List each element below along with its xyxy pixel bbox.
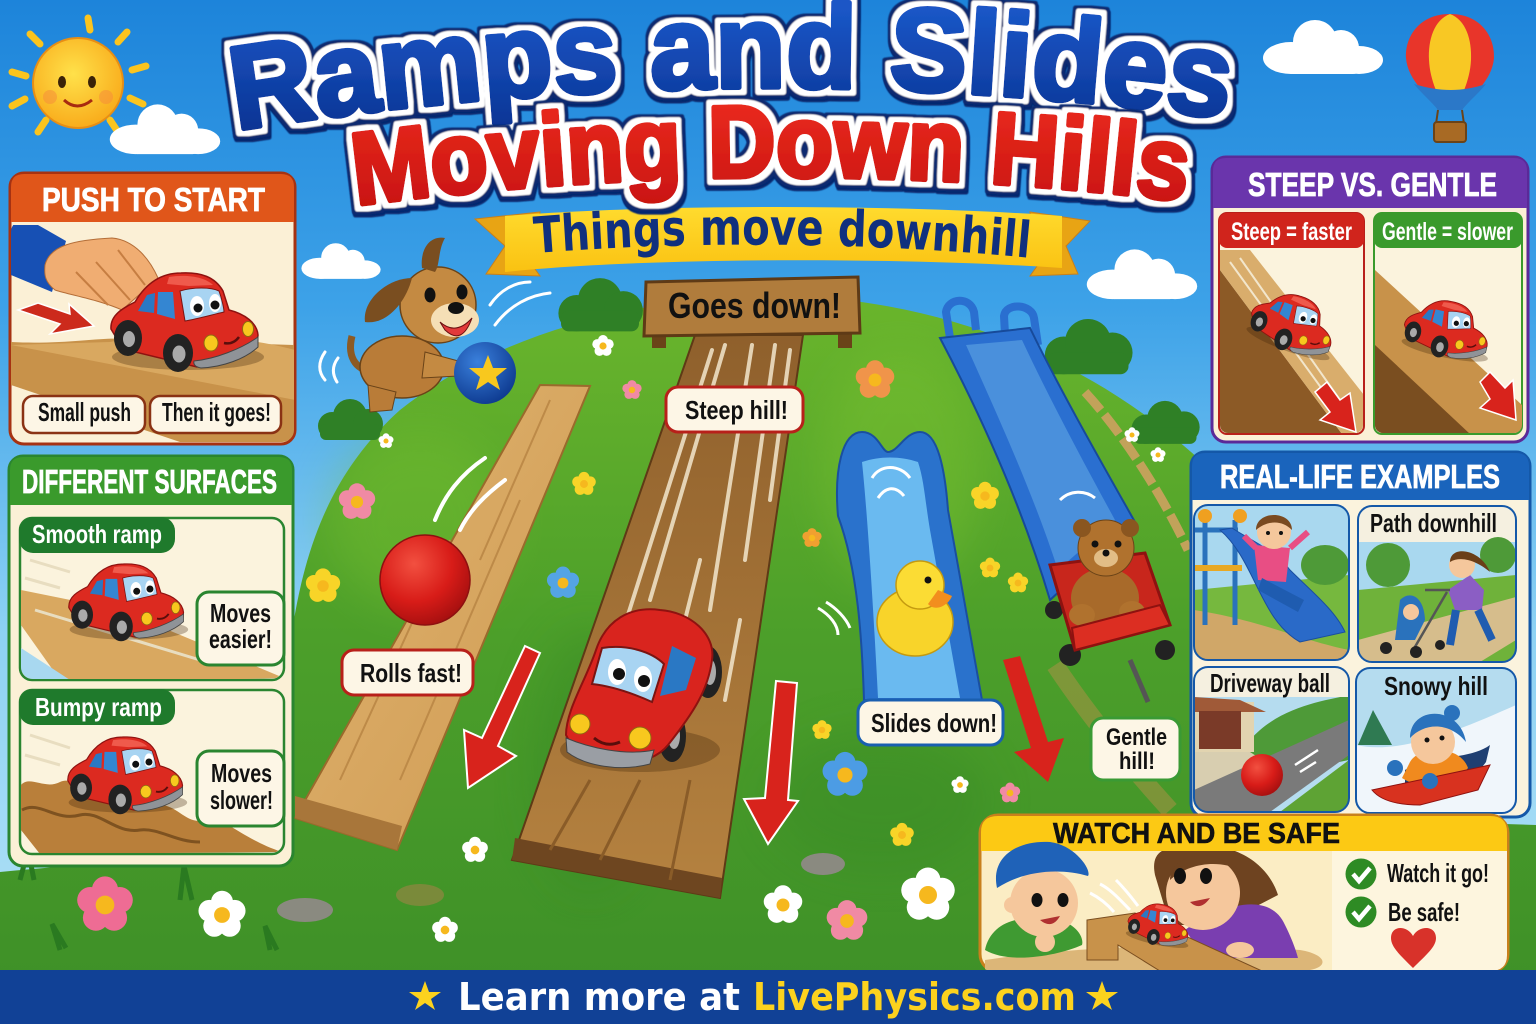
red ball rolling: [380, 535, 470, 625]
steep dark wooden ramp: [512, 335, 803, 898]
toy car on gentle ramp: [1399, 293, 1498, 368]
panel: push to start: [10, 173, 295, 444]
callout: moves easier: [197, 592, 284, 665]
mother: [1154, 845, 1298, 958]
example: playground slide: [1194, 505, 1349, 660]
panel: steep vs gentle: [1212, 157, 1528, 442]
cloud near sun: [110, 104, 220, 154]
label: Steep hill!: Steep hill!: [685, 395, 788, 425]
check: Be safe: [1346, 896, 1460, 928]
check: Watch it go: Watch it go!: [1387, 858, 1489, 888]
panel: different surfaces: [9, 456, 293, 866]
cloud right of hill: [1087, 249, 1197, 299]
header: watch and be safe: WATCH AND BE SAFE: [1053, 818, 1340, 850]
label: bumpy ramp: Bumpy ramp: [35, 692, 162, 722]
child: [985, 842, 1089, 958]
header: push to start: [11, 174, 294, 222]
right side background: [1332, 851, 1507, 971]
callout: moves easier: Moves: [210, 598, 271, 628]
label: Gentle hill!: [1091, 718, 1180, 780]
panel: watch and be safe: [980, 815, 1508, 972]
label: steep = faster: Steep = faster: [1231, 218, 1352, 246]
title line 2: Moving Down Hills: Moving Down Hills: [342, 96, 1198, 218]
motion lines near puppy: [320, 282, 550, 382]
header: push to start: PUSH TO START: [42, 181, 265, 218]
toy car on steep ramp: [1243, 282, 1346, 367]
decorative flowers on hill: [77, 335, 1165, 942]
example: snowy hill: Snowy hill: [1384, 671, 1488, 701]
label: Small push: Small push: [38, 397, 131, 427]
footer band: LivePhysics.com: [753, 975, 1076, 1019]
small blue slide: [837, 432, 982, 700]
scene: hand pushing car on ramp: [11, 225, 295, 442]
star left: [409, 981, 441, 1010]
small ramp: [1087, 913, 1262, 971]
label: Gentle hill!: Gentle: [1106, 724, 1167, 751]
toy car on smooth ramp: [69, 564, 188, 641]
light wooden ramp: [295, 385, 590, 850]
label: Steep hill!: [666, 387, 803, 432]
label: Slides down!: [858, 700, 1003, 745]
icon: heart: [1391, 928, 1436, 968]
sign: Goes down!: Goes down!: [668, 285, 841, 326]
panel: real-life examples: [1191, 452, 1530, 817]
example: path downhill: [1358, 506, 1516, 662]
toy car on bumpy ramp: [68, 737, 187, 814]
header: steep vs gentle: [1213, 158, 1527, 208]
sub-panel: steep = faster: [1219, 213, 1364, 434]
cloud top right: [1263, 20, 1383, 74]
large red car on ramp: [560, 609, 722, 772]
header: different surfaces: [10, 457, 292, 505]
arrow: gentle down: [1480, 372, 1516, 420]
sub-panel: gentle = slower: [1374, 213, 1522, 434]
sub-panel: bumpy ramp: [19, 689, 284, 854]
icon: hot air balloon: [1406, 14, 1494, 142]
check: Be safe: Be safe!: [1388, 897, 1460, 927]
label: Rolls fast!: Rolls fast!: [360, 658, 462, 688]
sign: Goes down!: [644, 277, 860, 348]
callout: moves easier: easier!: [209, 624, 272, 654]
label: Then it goes!: [150, 396, 281, 433]
green hill: [0, 278, 1536, 975]
rubber duck: [877, 561, 953, 656]
motion lines: [1090, 880, 1138, 912]
label: smooth ramp: Smooth ramp: [32, 519, 162, 549]
label: steep = faster: [1219, 213, 1364, 248]
arrow: down steep ramp: [744, 681, 798, 844]
motion lines near duck: [818, 602, 850, 635]
toy car: [111, 273, 264, 372]
callout: moves slower: [197, 751, 284, 826]
example: driveway ball: [1194, 667, 1349, 812]
label: Gentle hill!: hill!: [1119, 748, 1155, 775]
arrow: toward gentle hill: [1003, 656, 1064, 782]
header: different surfaces: DIFFERENT SURFACES: [22, 463, 277, 500]
label: Rolls fast!: [342, 650, 473, 695]
blue ball with star: [454, 342, 516, 404]
footer band: [0, 970, 1536, 1024]
label: smooth ramp: [19, 517, 175, 553]
red wagon with teddy bear: [1045, 519, 1175, 702]
arrow: down left ramp: [464, 646, 540, 788]
star right: [1086, 981, 1118, 1010]
callout: moves slower: slower!: [210, 785, 273, 815]
example: snowy hill: [1356, 668, 1516, 813]
label: Then it goes!: Then it goes!: [162, 397, 271, 427]
tall blue slide: [940, 301, 1135, 600]
toy car on small ramp: [1124, 898, 1196, 952]
cloud left of hill: [301, 243, 381, 279]
scene: mother watching toy car: [985, 845, 1322, 971]
label: Slides down!: Slides down!: [871, 708, 997, 738]
header: watch and be safe: [981, 816, 1507, 851]
example: driveway ball: Driveway ball: [1210, 668, 1330, 698]
check: Watch it go: [1346, 858, 1489, 890]
banner ribbon: things move downhill: Things move downhill: [532, 208, 1030, 258]
callout: moves slower: Moves: [211, 758, 272, 788]
sub-panel: smooth ramp: [19, 517, 284, 680]
label: bumpy ramp: [19, 689, 175, 725]
icon: smiling sun: [12, 18, 146, 132]
label: Small push: [23, 396, 145, 433]
footer text: Learn more at: [458, 975, 740, 1019]
arrow: steep down: [1315, 382, 1356, 432]
example: path downhill: Path downhill: [1370, 508, 1497, 538]
banner ribbon: things move downhill: [474, 207, 1091, 276]
puppy pushing ball: [351, 238, 479, 412]
